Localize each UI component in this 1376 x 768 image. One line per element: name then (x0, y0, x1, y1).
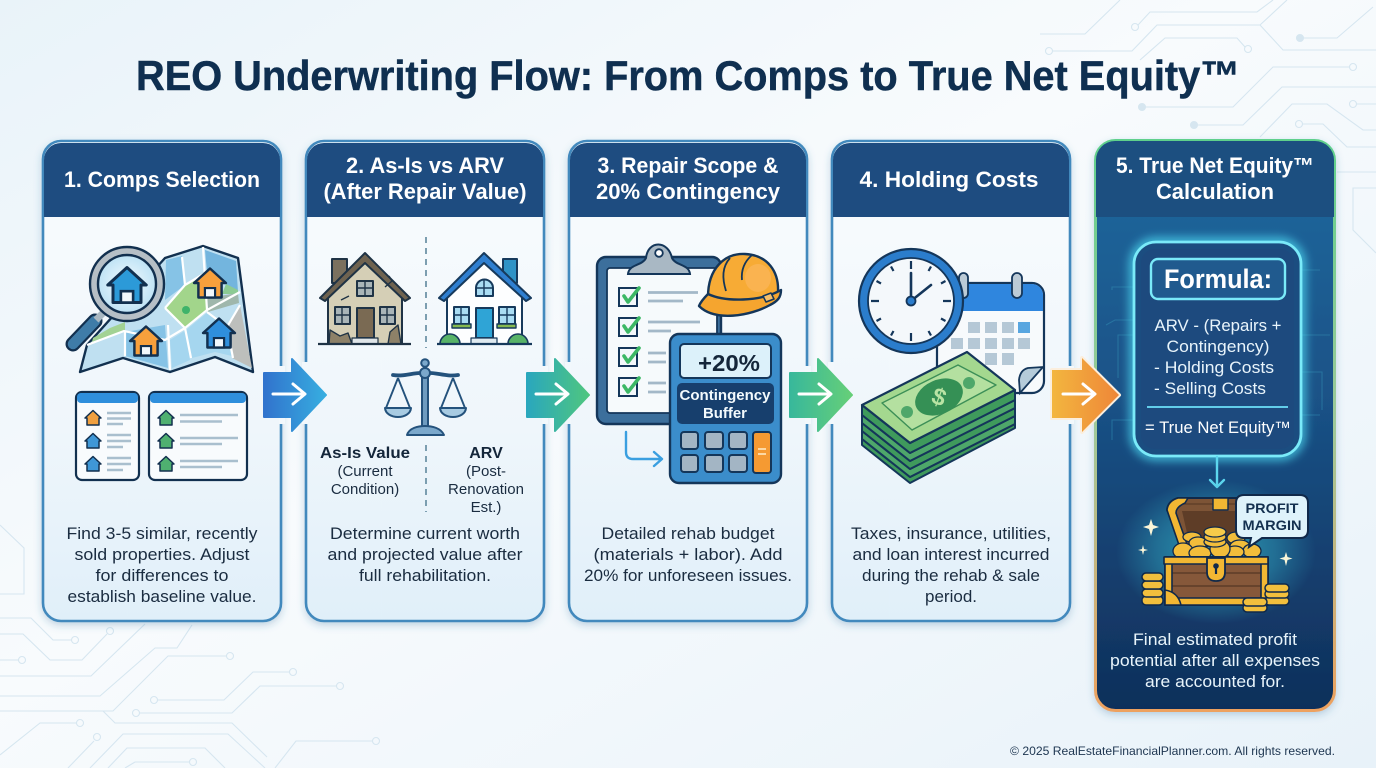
panel: 4. holding costs (832, 141, 1070, 621)
icon: clock (859, 249, 963, 353)
text: true net equity description: Final estimated profit (1133, 631, 1297, 649)
text: holding costs description: and loan interest incurred (852, 546, 1050, 564)
text: holding costs description: period. (925, 588, 977, 606)
heading: repair scope: 20% Contingency (596, 179, 781, 204)
icon: clipboard checklist (597, 244, 721, 424)
arrow: step 3 to 4 (790, 359, 852, 431)
icon: calendar (937, 273, 1044, 393)
text: repair scope description: Detailed rehab budget (602, 525, 775, 543)
arrow: formula to chest (1210, 457, 1224, 487)
text: comps description: Find 3-5 similar, recently (66, 525, 258, 543)
icon: calculator (670, 334, 781, 483)
text: comps description: for differences to (96, 567, 228, 585)
arrow: step 4 to 5 (1052, 358, 1119, 432)
icon: stack of cash: $ (928, 382, 950, 413)
text: true net equity description (1110, 631, 1320, 691)
text: holding costs description (851, 525, 1051, 606)
icon: calculator: Buffer (703, 406, 747, 422)
callout: formula box: - Selling Costs (1154, 380, 1266, 398)
callout: profit margin: PROFIT (1246, 500, 1299, 516)
heading: true net equity: 5. True Net Equity™ (1116, 153, 1314, 178)
label: ARV: Est.) (471, 499, 501, 516)
text: true net equity description: are accounted for. (1145, 673, 1285, 691)
label: ARV (448, 445, 524, 516)
callout: formula box: ARV - (Repairs + (1154, 317, 1282, 335)
icon: hard hat (699, 254, 781, 316)
icon: stack of cash (862, 352, 1015, 483)
text: repair scope description: (materials + labor). Add (594, 546, 782, 564)
heading: holding costs: 4. Holding Costs (860, 167, 1038, 192)
callout: formula box (1134, 242, 1301, 456)
heading: comps selection: 1. Comps Selection (64, 167, 260, 192)
callout: profit margin: MARGIN (1242, 517, 1302, 533)
text: repair scope description: 20% for unforeseen issues. (584, 567, 792, 585)
panel: 2. as-is vs ARV (306, 141, 544, 621)
heading: repair scope (570, 143, 806, 217)
title: REO Underwriting Flow: From Comps to True Net Equity™ (136, 52, 1240, 99)
icon: distressed house (318, 253, 411, 344)
icon: sparkles (1138, 519, 1292, 566)
callout: formula box: Formula: (1164, 264, 1272, 294)
text: comps description (66, 525, 258, 606)
text: true net equity description: potential after all expenses (1110, 652, 1320, 670)
icon: balance scale (385, 359, 466, 435)
heading: as-is vs ARV: (After Repair Value) (324, 179, 526, 204)
callout: formula box: = True Net Equity™ (1145, 419, 1291, 437)
arrow: step 1 to 2 (264, 359, 326, 431)
text: as-is vs ARV description: and projected value after (328, 546, 523, 564)
callout: formula box: Contingency) (1166, 338, 1270, 356)
arrow: checklist to calculator (626, 432, 662, 466)
heading: as-is vs ARV: 2. As-Is vs ARV (346, 153, 504, 178)
label: as-is value (320, 445, 410, 498)
label: as-is value: Condition) (331, 481, 399, 498)
callout: formula box: - Holding Costs (1154, 359, 1274, 377)
footer: copyright: © 2025 RealEstateFinancialPlanner.com. All rights reserved. (1010, 744, 1335, 758)
heading: comps selection (44, 143, 280, 217)
icon: calculator: Contingency (680, 388, 770, 404)
label: ARV: Renovation (448, 481, 524, 498)
arrow: step 2 to 3 (527, 359, 589, 431)
text: as-is vs ARV description (328, 525, 523, 585)
icon: treasure chest with coins (1116, 480, 1316, 624)
icon: map with magnifier (73, 246, 253, 372)
label: ARV: (Post- (466, 463, 506, 480)
heading: as-is vs ARV (307, 143, 543, 217)
panel: 5. true net equity (1096, 140, 1334, 710)
heading: holding costs (833, 143, 1069, 217)
text: holding costs description: during the rehab & sale (862, 567, 1040, 585)
label: ARV: ARV (469, 445, 503, 462)
icon: comparable listing cards (76, 392, 247, 480)
label: as-is value: As-Is Value (320, 445, 410, 462)
text: holding costs description: Taxes, insurance, utilities, (851, 525, 1051, 543)
icon: renovated house (437, 253, 532, 344)
text: comps description: sold properties. Adjust (74, 546, 250, 564)
text: as-is vs ARV description: Determine current worth (330, 525, 520, 543)
text: comps description: establish baseline value. (68, 588, 256, 606)
icon: calculator: +20% (698, 350, 760, 376)
text: repair scope description (584, 525, 792, 585)
heading: repair scope: 3. Repair Scope & (598, 153, 779, 178)
callout: profit margin (1236, 495, 1308, 547)
label: as-is value: (Current (337, 463, 393, 480)
panel: 3. repair scope (569, 141, 807, 621)
panel: 1. comps selection (43, 141, 281, 621)
text: as-is vs ARV description: full rehabilitation. (359, 567, 491, 585)
heading: true net equity (1096, 141, 1334, 217)
heading: true net equity: Calculation (1156, 179, 1274, 204)
